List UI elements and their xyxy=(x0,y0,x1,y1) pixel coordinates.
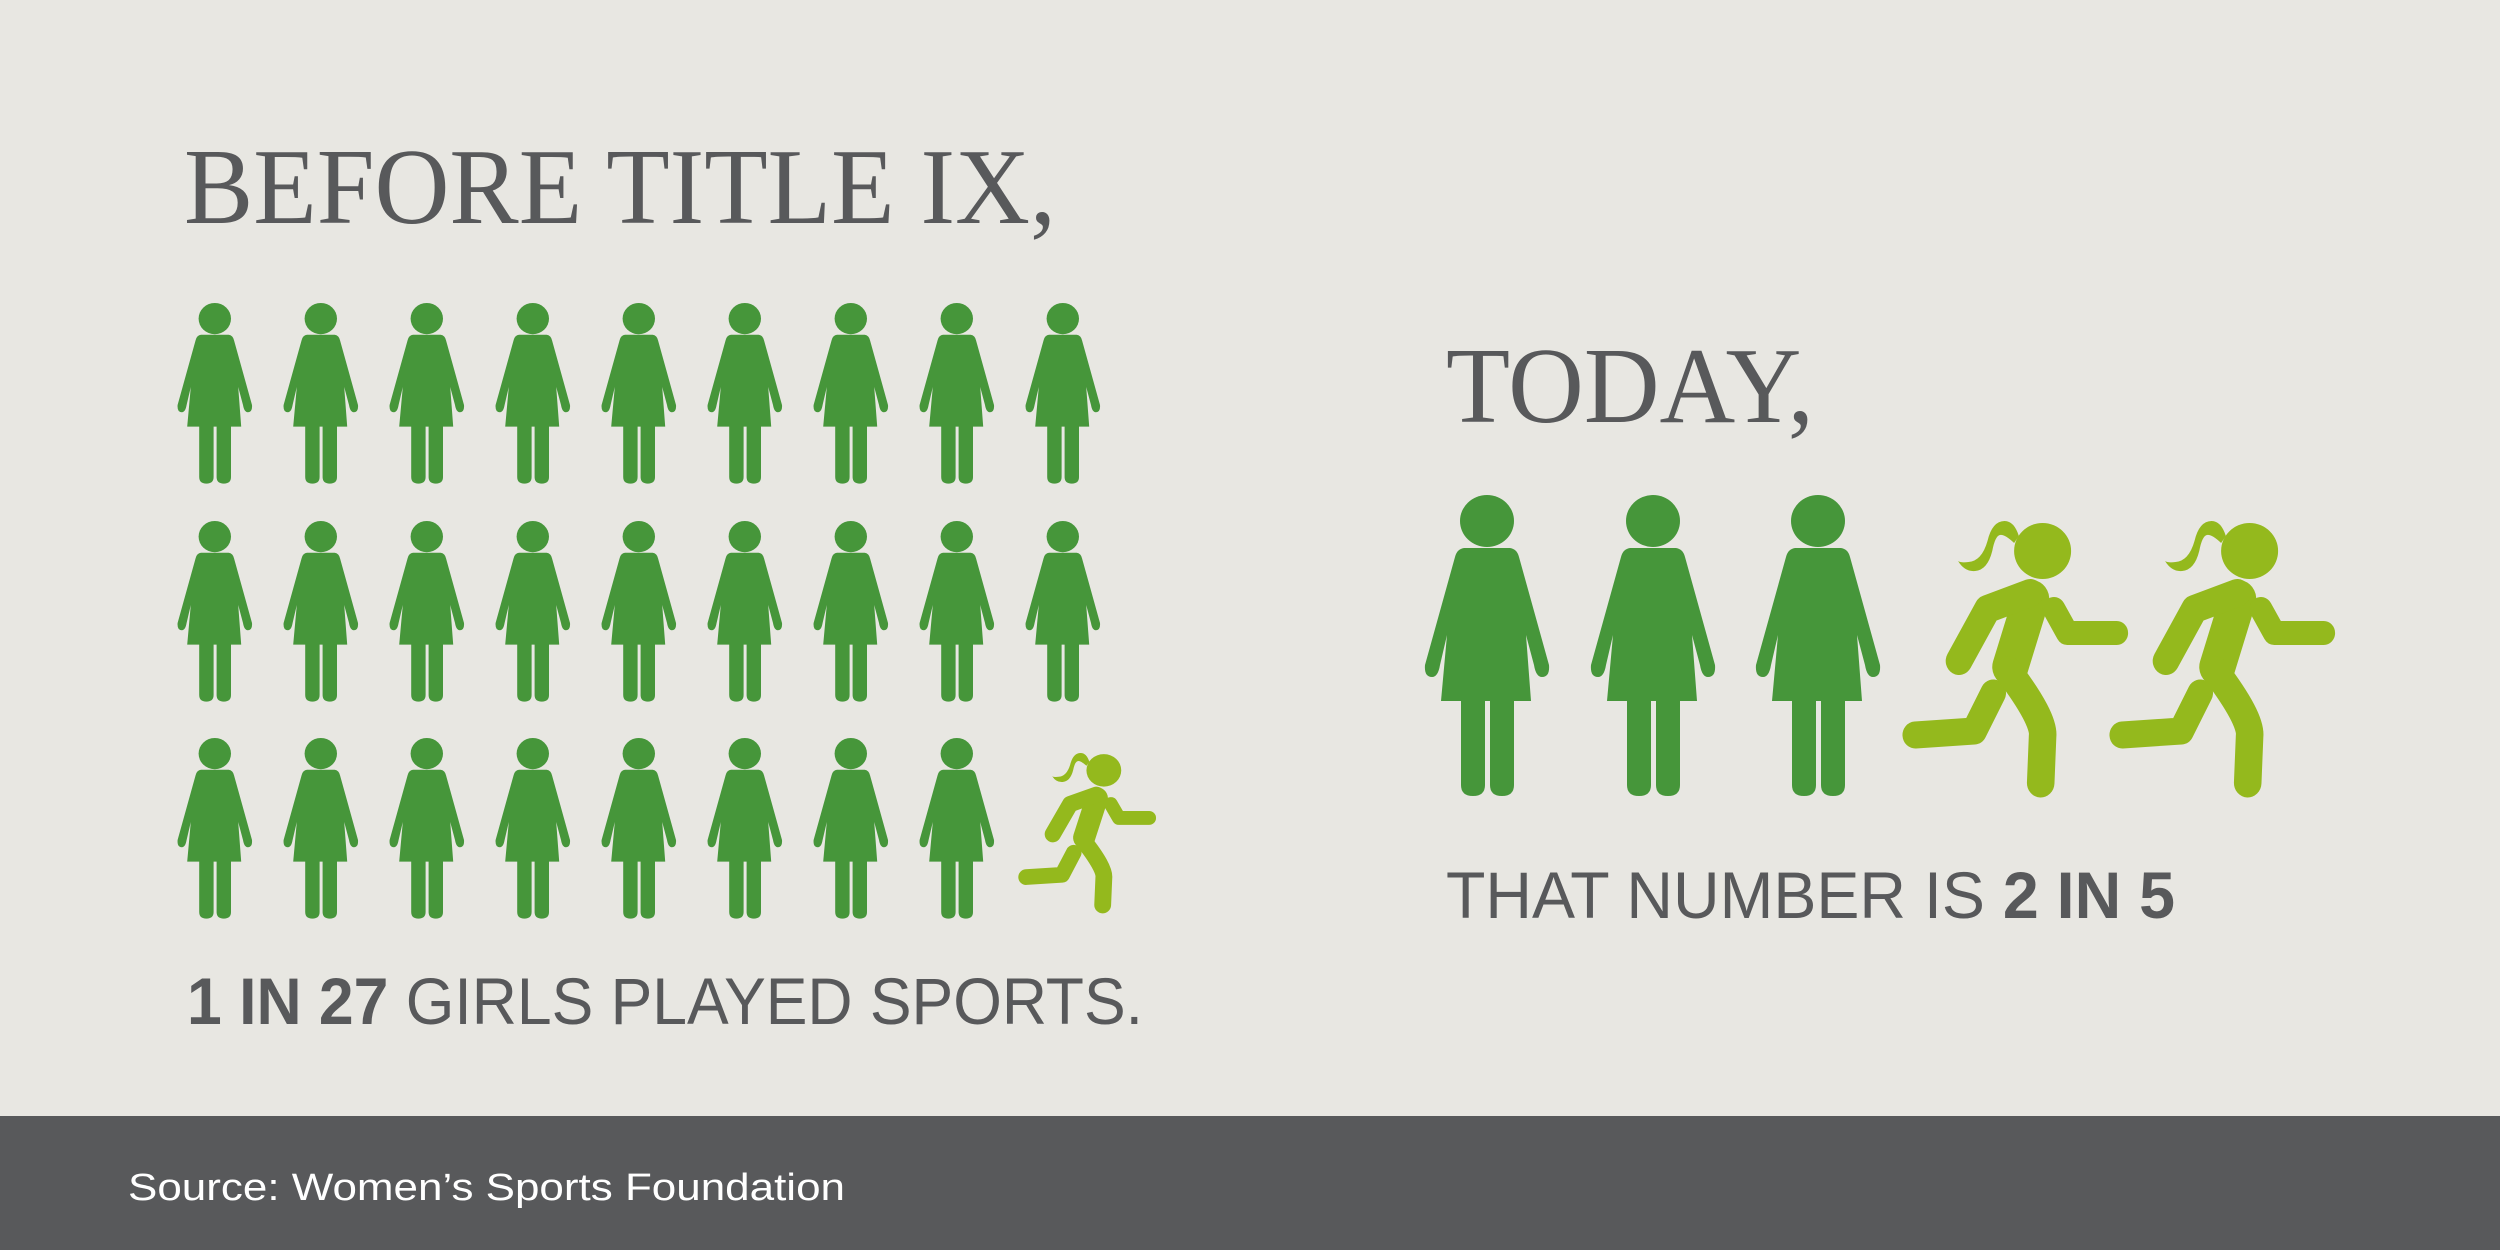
title: before title IX: BEFORE TITLE IX, xyxy=(184,128,1056,247)
pictogram grid: 26 women and 1 runner xyxy=(178,303,1149,919)
heading: today: TODAY, xyxy=(1446,327,1814,446)
source text: Source: Women’s Sports Foundation xyxy=(128,1167,845,1209)
footer bar xyxy=(0,1116,2500,1250)
pictogram: 3 women and 2 runners xyxy=(1425,495,2324,796)
caption: 1 in 27: 1 IN 27 GIRLS PLAYED SPORTS. xyxy=(187,964,1143,1038)
caption: 2 in 5: THAT NUMBER IS 2 IN 5 xyxy=(1446,858,2175,932)
icon: small runner xyxy=(1026,753,1149,905)
